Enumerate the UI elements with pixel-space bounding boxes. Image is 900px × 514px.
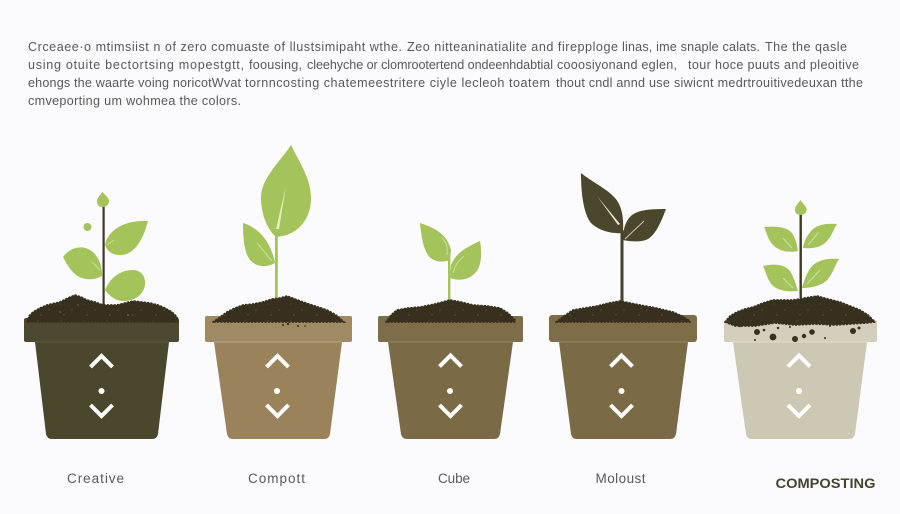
plant 1 — [63, 192, 148, 306]
text block: intro paragraph: foousing, — [249, 58, 302, 72]
pot 2: tan with tall leaf — [205, 145, 352, 439]
label: COMPOSTING: COMPOSTING — [776, 475, 876, 491]
pot rim 2 — [205, 316, 352, 342]
pot body 5 — [733, 342, 867, 439]
arrows 5 — [788, 356, 810, 416]
label: Cube: Cube — [438, 471, 470, 486]
pot rim 3 — [378, 316, 523, 342]
arrows 1 — [90, 356, 112, 416]
arrows 2 — [266, 356, 288, 416]
text block: intro paragraph: using otuite bectortsing mopestgtt, — [28, 58, 244, 72]
plant 4 — [581, 173, 666, 302]
text block: intro paragraph: cleehyche or clomrootertend ondeenhdabtial — [307, 58, 553, 72]
pot 3: brown with small sprout — [378, 223, 523, 439]
text block: intro paragraph: cooosiyonand eglen, — [557, 58, 677, 72]
pot body 1 — [35, 342, 169, 439]
soil 1 — [27, 295, 178, 322]
text block: intro paragraph: use siwicnt medrtrouitivedeuxan tthe — [649, 76, 863, 90]
pot rim 4 — [549, 315, 697, 342]
arrows 3 — [440, 356, 462, 416]
pot body 4 — [559, 342, 688, 439]
plant 2 — [243, 145, 311, 300]
soil 5 — [725, 296, 875, 342]
pot body 3 — [388, 342, 513, 439]
text block: intro paragraph: ehongs the waarte voing noricotWvat — [28, 76, 242, 90]
label: Compott: Compott — [248, 471, 305, 486]
arrows 4 — [610, 356, 632, 416]
text block: intro paragraph: tornncosting chatemeestritere ciyle lecleoh toatem — [245, 76, 550, 90]
pot 5: pale composting pot — [724, 200, 877, 439]
pot 1: dark olive with sprout — [24, 192, 179, 439]
pot body 2 — [214, 342, 342, 439]
pot rim 5 — [724, 320, 877, 342]
soil 2 — [213, 296, 344, 327]
text block: intro paragraph: Zeo nitteaninatialite and firepploge — [407, 40, 618, 54]
text block: intro paragraph: The the qasle — [765, 40, 847, 54]
text block: intro paragraph: cmveporting um wohmea the colors. — [28, 94, 241, 108]
label: Creative: Creative — [67, 471, 124, 486]
pot rim 1 — [24, 318, 179, 342]
soil 3 — [386, 300, 515, 322]
plant 5 — [763, 200, 839, 298]
text block: intro paragraph: tour hoce puuts and pleoitive — [688, 58, 859, 72]
text block: intro paragraph — [28, 40, 863, 108]
text block: intro paragraph: linas, ime snaple calats. — [622, 40, 760, 54]
soil 4 — [556, 301, 690, 322]
pot 4: brown with dark seedling — [549, 173, 697, 439]
text block: intro paragraph: Crceaee·o mtimsiist n of zero comuaste of llustsimipaht wthe. — [28, 40, 402, 54]
text block: intro paragraph: thout cndl annd — [556, 76, 645, 90]
plant 3 — [420, 223, 481, 301]
label: Moloust: Moloust — [596, 471, 646, 486]
